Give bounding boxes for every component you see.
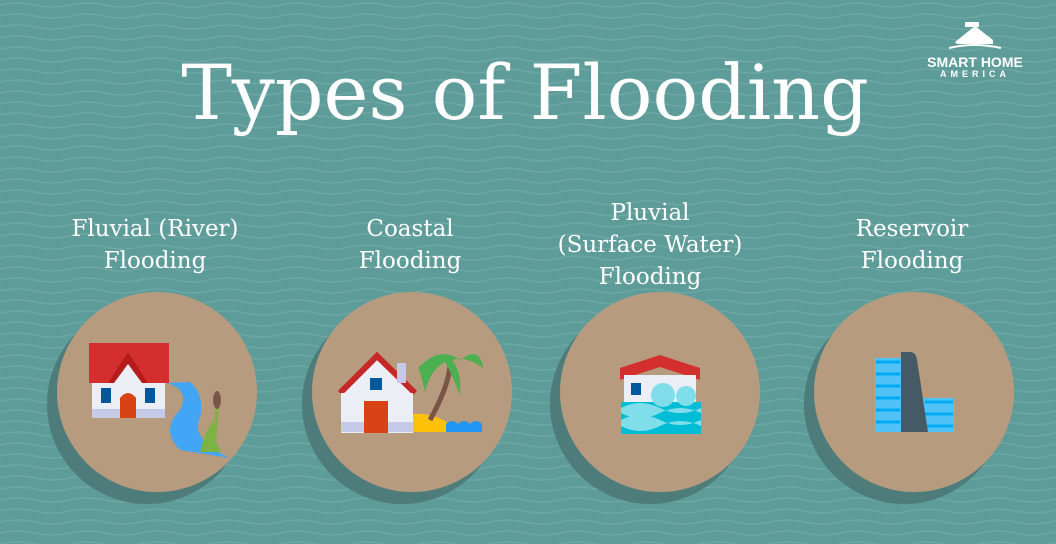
logo bbox=[927, 22, 1023, 79]
label: coastal bbox=[359, 216, 461, 274]
title: Types of Flooding bbox=[181, 48, 869, 137]
label: fluvial: Fluvial (River) bbox=[71, 216, 239, 242]
logo: AMERICA bbox=[940, 69, 1010, 79]
icon: flooded house bbox=[620, 355, 701, 434]
logo: SMART HOME bbox=[927, 54, 1023, 70]
label: fluvial: Flooding bbox=[104, 248, 206, 274]
label: pluvial: Flooding bbox=[599, 264, 701, 290]
label: coastal: Coastal bbox=[366, 216, 454, 242]
icon: coastal house bbox=[340, 354, 483, 433]
icon: river house bbox=[89, 343, 230, 458]
circle: pluvial bbox=[550, 292, 760, 504]
icon: dam bbox=[875, 352, 954, 432]
label: pluvial: Pluvial bbox=[610, 200, 690, 226]
label: pluvial bbox=[558, 200, 742, 290]
label: reservoir: Flooding bbox=[861, 248, 963, 274]
label: reservoir: Reservoir bbox=[856, 216, 968, 242]
circle: coastal bbox=[302, 292, 512, 504]
label: pluvial: (Surface Water) bbox=[558, 232, 742, 258]
label: reservoir bbox=[856, 216, 968, 274]
label: coastal: Flooding bbox=[359, 248, 461, 274]
circle: reservoir bbox=[804, 292, 1014, 504]
circle: fluvial bbox=[47, 292, 257, 504]
label: fluvial bbox=[71, 216, 239, 274]
